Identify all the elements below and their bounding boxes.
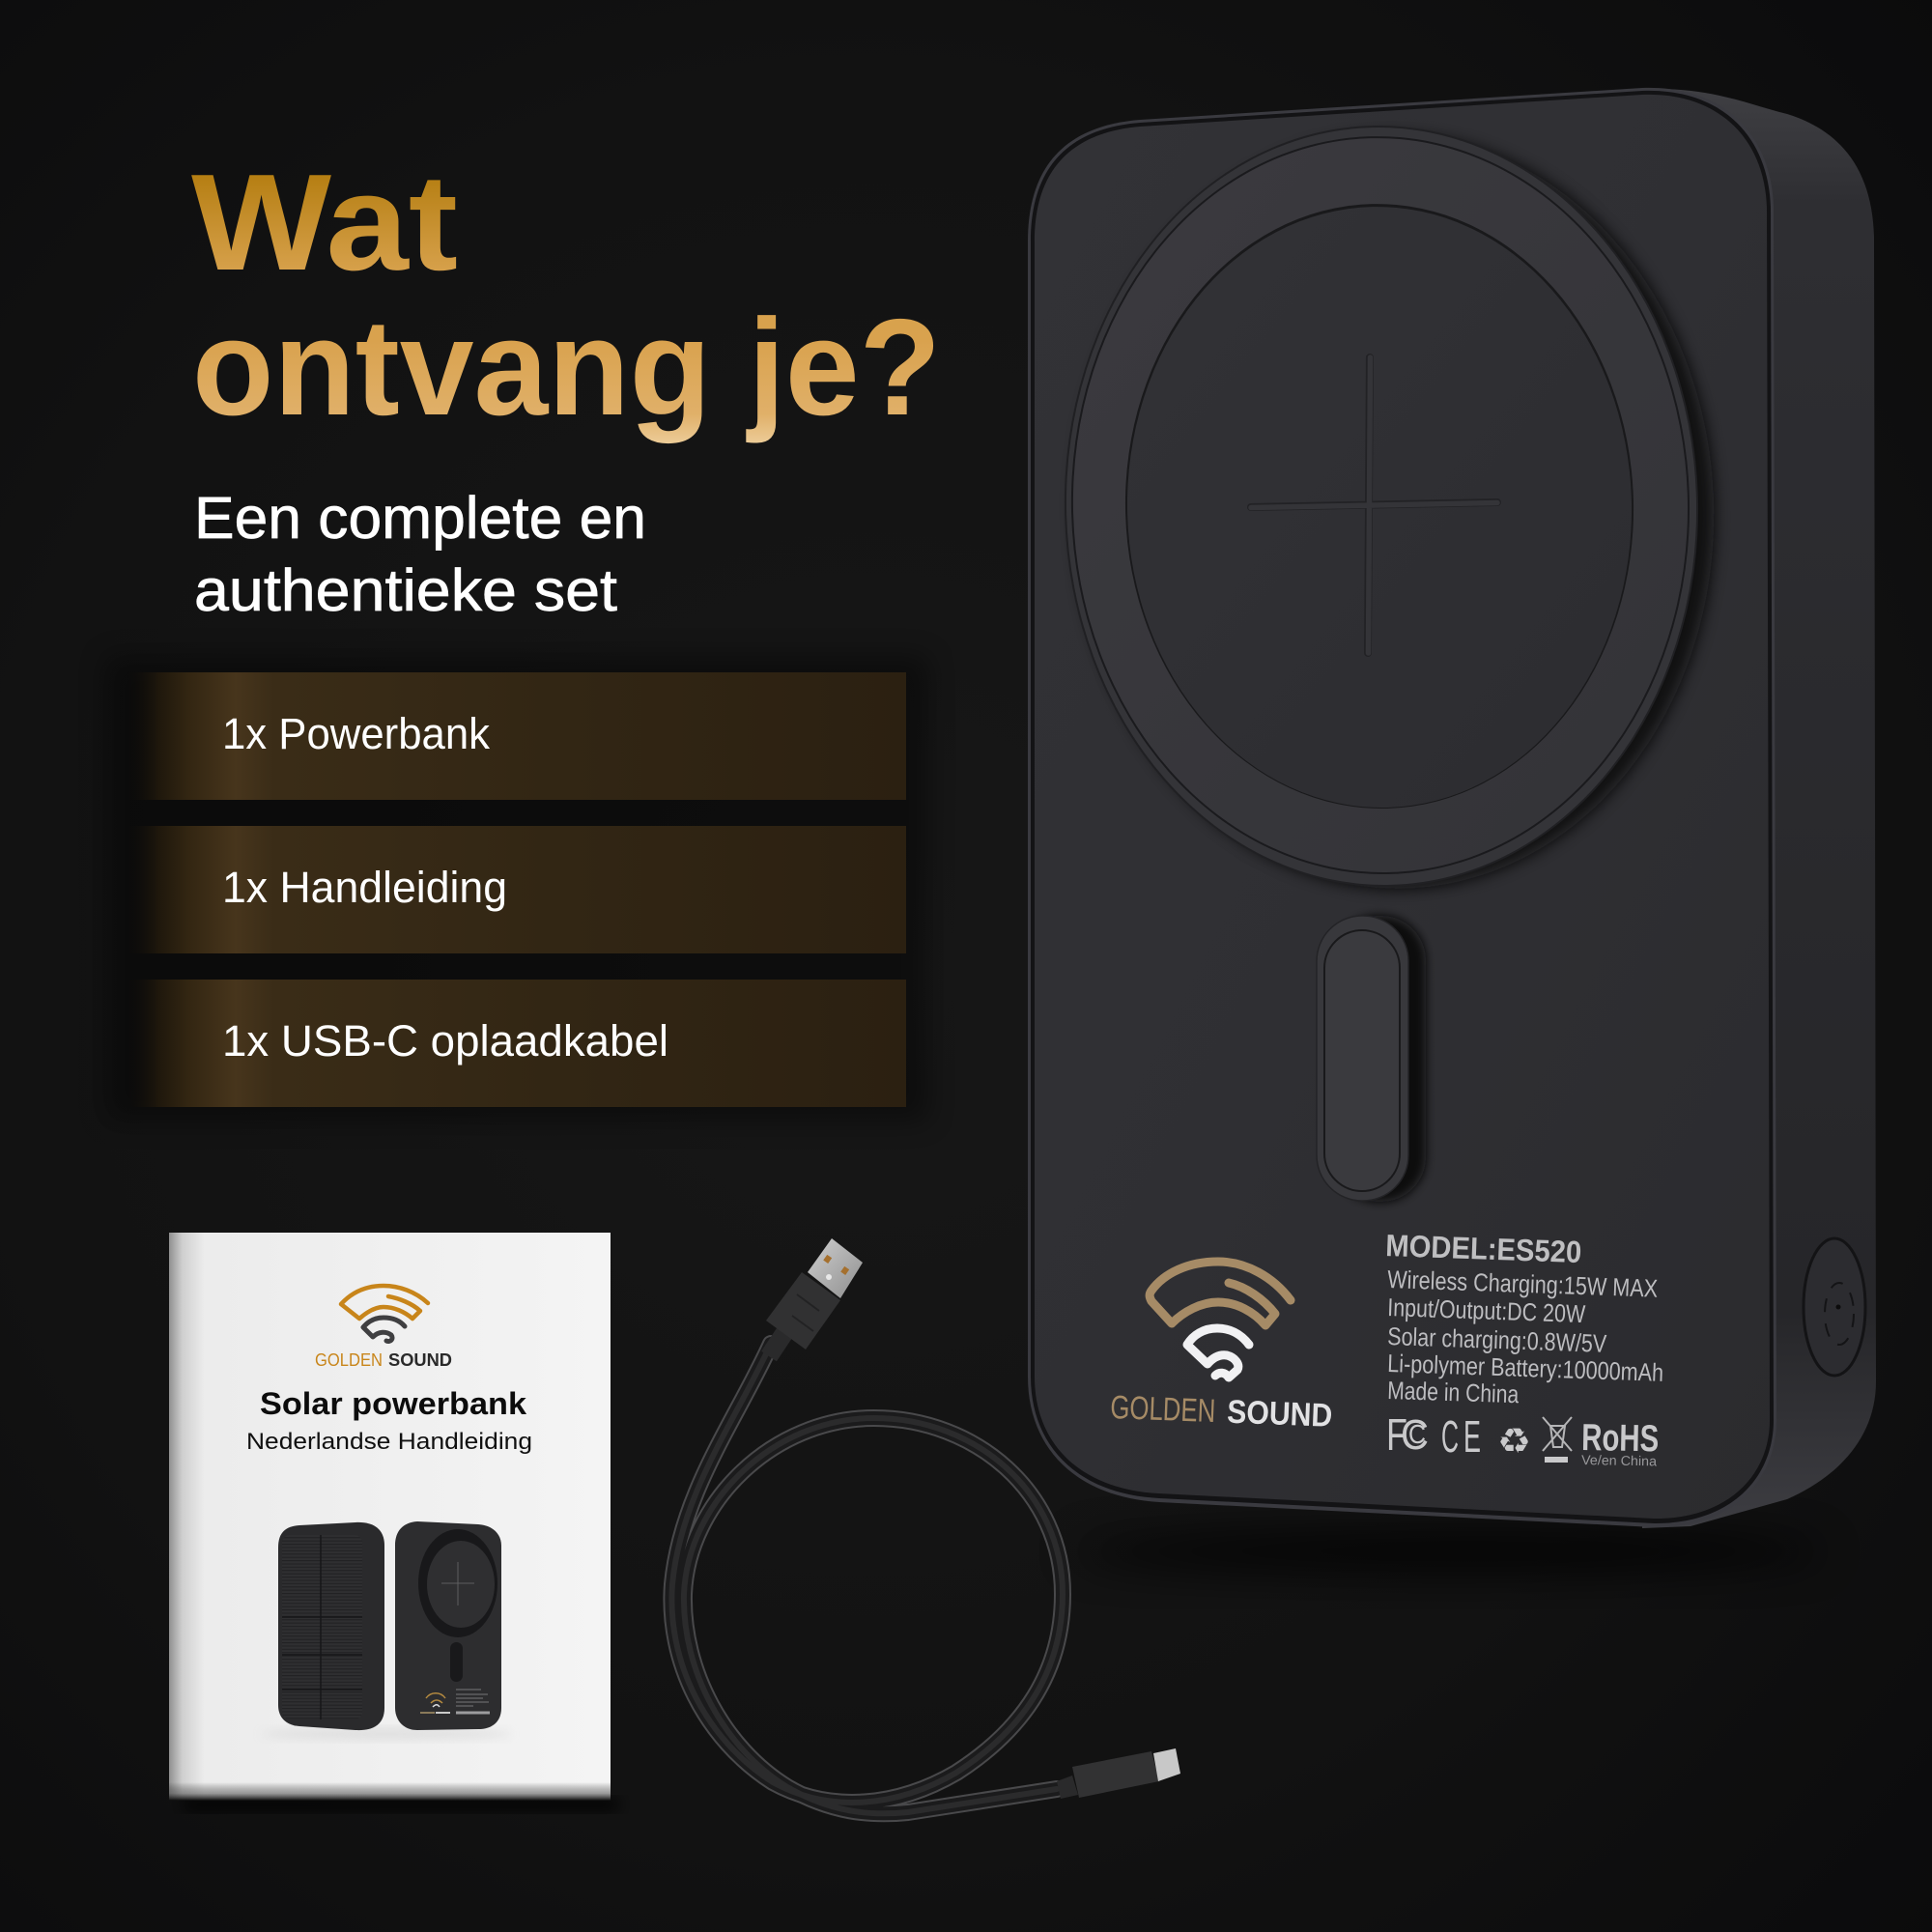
certification marks: Ve/en China xyxy=(1581,1452,1657,1468)
manual logo xyxy=(341,1286,428,1342)
golden sound logo icon xyxy=(1150,1262,1291,1378)
specifications label: Li-polymer Battery:10000mAh xyxy=(1387,1349,1664,1387)
golden sound wordmark: SOUND xyxy=(1227,1394,1333,1435)
certification marks: C xyxy=(1408,1419,1426,1449)
title: Wat xyxy=(191,146,458,299)
specifications label: Wireless Charging:15W MAX xyxy=(1387,1264,1659,1303)
certification marks: E xyxy=(1463,1411,1481,1462)
oval button xyxy=(1317,916,1426,1202)
certification marks xyxy=(1386,1409,1660,1468)
usb-a connector xyxy=(766,1238,863,1356)
magnetic ring xyxy=(1055,117,1723,896)
list item: manual xyxy=(127,826,906,953)
manual subtitle: Nederlandse Handleiding xyxy=(246,1429,532,1455)
cable xyxy=(671,1238,1180,1813)
powerbank rim xyxy=(1028,88,1776,1527)
certification marks: RoHS xyxy=(1581,1417,1660,1460)
powerbank face xyxy=(1035,95,1770,1519)
manual title: Solar powerbank xyxy=(260,1386,526,1421)
powerbank floor shadow xyxy=(1072,1532,1826,1571)
golden sound wordmark: GOLDEN xyxy=(1110,1389,1216,1430)
manual image: wireless side xyxy=(395,1521,501,1730)
cable coil xyxy=(671,1344,1063,1813)
manual brand: GOLDEN xyxy=(315,1350,383,1370)
specifications label xyxy=(1385,1228,1664,1408)
specifications label: Solar charging:0.8W/5V xyxy=(1387,1321,1607,1358)
manual xyxy=(169,1233,618,1810)
list item: manual: 1x Handleiding xyxy=(222,863,507,912)
powerbank side xyxy=(1642,89,1876,1528)
certification marks: ♻ xyxy=(1497,1421,1531,1461)
certification marks: C xyxy=(1401,1411,1429,1459)
certification marks: F xyxy=(1386,1409,1407,1460)
subtitle xyxy=(194,485,646,623)
specifications label: Input/Output:DC 20W xyxy=(1387,1293,1586,1328)
specifications label: MODEL:ES520 xyxy=(1385,1228,1582,1269)
wireless charging cross xyxy=(1251,357,1497,653)
usb-c connector xyxy=(1057,1748,1180,1799)
manual brand: SOUND xyxy=(388,1350,452,1370)
side power button xyxy=(1804,1238,1865,1376)
subtitle: Een complete en xyxy=(194,485,646,551)
manual brand xyxy=(315,1350,452,1370)
list item: cable: 1x USB-C oplaadkabel xyxy=(222,1016,668,1065)
title: ontvang je? xyxy=(192,291,941,444)
manual shadow xyxy=(184,1799,618,1810)
list of contents xyxy=(106,657,927,1121)
golden sound wordmark xyxy=(1110,1389,1333,1435)
powerbank xyxy=(1028,88,1876,1571)
list item: powerbank: 1x Powerbank xyxy=(222,709,490,758)
title xyxy=(191,146,941,444)
list item: powerbank xyxy=(127,672,906,800)
subtitle: authentieke set xyxy=(194,557,617,623)
manual page xyxy=(169,1233,611,1801)
manual image: solar side xyxy=(261,1522,512,1740)
certification marks: C xyxy=(1441,1411,1459,1462)
list item: cable xyxy=(127,980,906,1107)
specifications label: Made in China xyxy=(1387,1376,1520,1408)
